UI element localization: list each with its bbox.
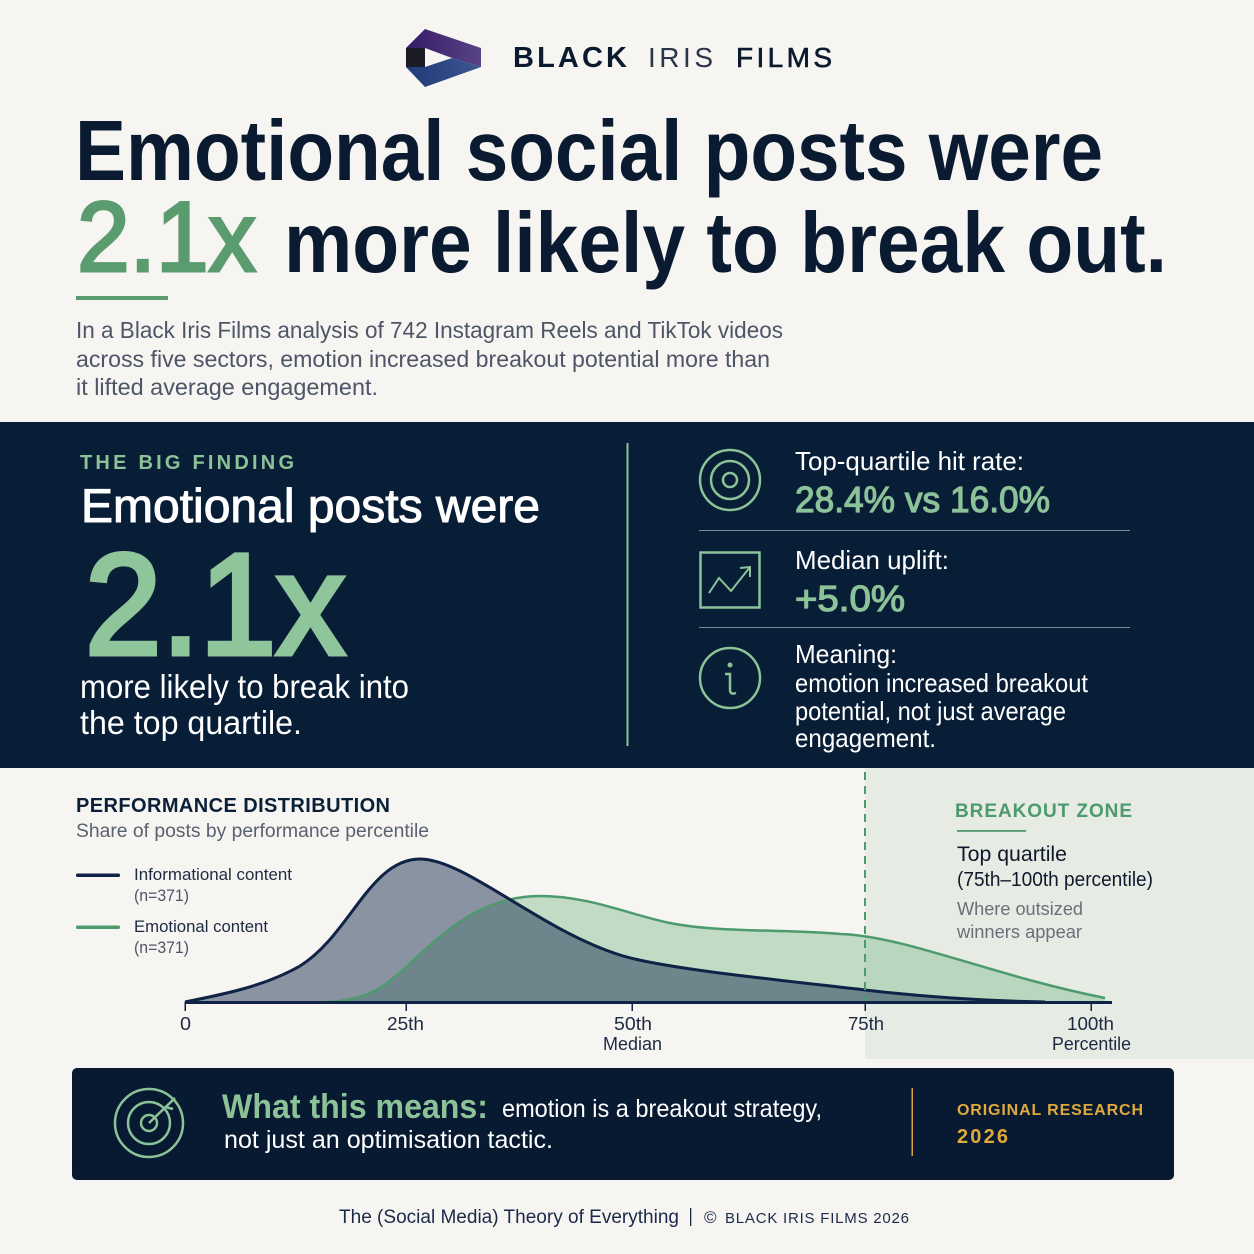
finding caption bbox=[80, 668, 409, 741]
stat: meaning: potential, not just average bbox=[795, 696, 1066, 726]
intro paragraph bbox=[76, 317, 783, 400]
x axis: Percentile bbox=[1052, 1034, 1131, 1054]
takeaway text: not just an optimisation tactic. bbox=[224, 1126, 553, 1154]
big number 2.1x: 2.1x bbox=[85, 524, 345, 685]
footer bbox=[339, 1207, 909, 1228]
icon: info circle bbox=[700, 648, 760, 708]
stat: meaning: emotion increased breakout bbox=[795, 668, 1089, 698]
stat: top-quartile hit rate: 28.4% vs 16.0% bbox=[795, 479, 1050, 520]
stat: top-quartile hit rate: Top-quartile hit rate: bbox=[795, 446, 1024, 476]
stat: meaning: Meaning: bbox=[795, 639, 897, 669]
x axis: Median bbox=[603, 1034, 662, 1054]
legend: informational content: (n=371) bbox=[134, 886, 189, 905]
original research badge: ORIGINAL RESEARCH bbox=[957, 1102, 1143, 1119]
stat: meaning bbox=[795, 639, 1089, 753]
takeaway text: What this means: bbox=[222, 1088, 488, 1126]
finding heading: Emotional posts were bbox=[81, 479, 540, 532]
breakout zone annotation: Where outsized bbox=[957, 899, 1083, 919]
stat: median uplift: +5.0% bbox=[795, 578, 905, 619]
x axis: 0 bbox=[180, 1014, 191, 1034]
original research badge: 2026 bbox=[957, 1126, 1008, 1148]
finding caption: more likely to break into bbox=[80, 668, 409, 705]
intro paragraph: it lifted average engagement. bbox=[76, 374, 378, 400]
title: Emotional social posts were bbox=[75, 104, 1103, 199]
title: 2.1x bbox=[77, 181, 256, 292]
panel: what this means bbox=[72, 1068, 1174, 1180]
informational content curve line bbox=[185, 859, 1045, 1002]
breakout zone annotation: winners appear bbox=[956, 922, 1082, 942]
icon: black iris logo mark bbox=[406, 29, 481, 87]
emotional content curve line bbox=[327, 896, 1105, 1002]
legend bbox=[76, 865, 292, 957]
footer: © bbox=[704, 1208, 717, 1227]
curve fills bbox=[185, 859, 1105, 1002]
chart heading: PERFORMANCE DISTRIBUTION bbox=[76, 795, 390, 817]
chart heading bbox=[76, 795, 429, 842]
title accent rule bbox=[76, 296, 168, 300]
brand name: BLACK bbox=[513, 42, 627, 74]
x axis: 100th bbox=[1067, 1014, 1114, 1034]
legend: emotional content: Emotional content bbox=[134, 917, 268, 936]
stat: meaning: engagement. bbox=[795, 723, 936, 753]
brand name bbox=[513, 42, 832, 74]
stat: median uplift bbox=[795, 545, 949, 619]
stat: median uplift: Median uplift: bbox=[795, 545, 949, 575]
panel: breakout zone shading bbox=[865, 768, 1254, 1059]
brand name: FILMS bbox=[736, 42, 832, 73]
x axis: 50th bbox=[614, 1014, 652, 1034]
brand name: IRIS bbox=[648, 42, 713, 73]
takeaway text bbox=[222, 1088, 822, 1154]
header logo bbox=[406, 29, 832, 87]
original research badge bbox=[957, 1102, 1143, 1148]
title bbox=[75, 104, 1167, 292]
finding eyebrow: THE BIG FINDING bbox=[80, 452, 294, 474]
chart heading: Share of posts by performance percentile bbox=[76, 821, 429, 842]
x axis bbox=[180, 1001, 1131, 1054]
x axis: 75th bbox=[848, 1014, 884, 1034]
takeaway text: emotion is a breakout strategy, bbox=[502, 1095, 822, 1123]
icon: concentric target bbox=[700, 450, 760, 510]
legend: informational content: Informational content bbox=[134, 865, 292, 884]
legend: emotional content bbox=[76, 917, 268, 957]
distribution chart bbox=[180, 772, 1131, 1054]
footer: The (Social Media) Theory of Everything bbox=[339, 1207, 679, 1228]
intro paragraph: across five sectors, emotion increased breakout potential more than bbox=[76, 346, 770, 372]
breakout zone annotation: (75th–100th percentile) bbox=[957, 869, 1153, 891]
panel: the big finding bbox=[0, 422, 1254, 768]
stat: top-quartile hit rate bbox=[795, 446, 1050, 520]
breakout zone annotation bbox=[955, 801, 1153, 942]
icon: trend chart bbox=[700, 552, 760, 608]
legend: emotional content: (n=371) bbox=[134, 938, 189, 957]
breakout zone annotation: Top quartile bbox=[957, 843, 1067, 866]
icon: target with arrow bbox=[115, 1089, 183, 1157]
breakout zone annotation: BREAKOUT ZONE bbox=[955, 801, 1132, 822]
x axis: 25th bbox=[387, 1014, 424, 1034]
footer: BLACK IRIS FILMS 2026 bbox=[725, 1210, 909, 1227]
intro paragraph: In a Black Iris Films analysis of 742 Instagram Reels and TikTok videos bbox=[76, 317, 783, 343]
finding caption: the top quartile. bbox=[80, 704, 302, 741]
title: more likely to break out. bbox=[284, 196, 1167, 291]
legend: informational content bbox=[76, 865, 292, 905]
